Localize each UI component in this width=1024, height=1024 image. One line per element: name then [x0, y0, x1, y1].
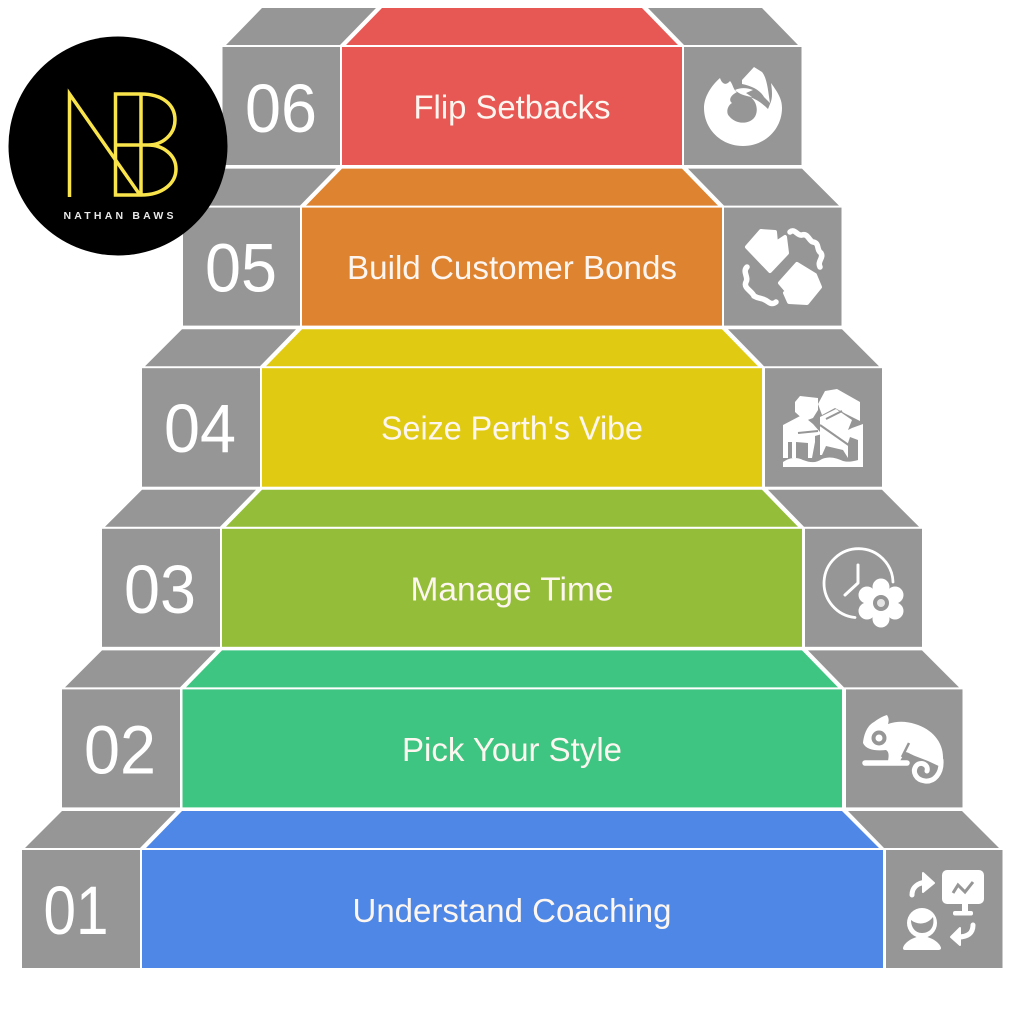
number 02: 02	[84, 712, 156, 788]
step 04: Seize Perth's Vibe	[142, 329, 882, 487]
icon: clock and gear	[824, 549, 904, 628]
label: Understand Coaching: Understand Coaching	[352, 892, 672, 929]
step 01: Understand Coaching	[22, 811, 1002, 968]
icon: city buildings	[783, 389, 863, 467]
label: Flip Setbacks: Flip Setbacks	[414, 88, 610, 126]
icon: handshake	[745, 231, 822, 304]
label: Pick Your Style: Pick Your Style	[402, 731, 622, 768]
number 01: 01	[44, 872, 108, 949]
number 05: 05	[205, 230, 277, 306]
logo monogram NB	[70, 94, 176, 197]
step 02: Pick Your Style	[62, 650, 962, 807]
icon: flame fox	[704, 67, 782, 146]
number 06: 06	[245, 70, 317, 147]
logo: Nathan Baws badge	[8, 36, 228, 256]
step 03: Manage Time	[102, 490, 922, 647]
icon: chameleon	[863, 715, 943, 781]
icon: coaching presentation	[903, 870, 984, 950]
number 04: 04	[164, 390, 236, 467]
label: Build Customer Bonds: Build Customer Bonds	[347, 249, 677, 286]
label: Seize Perth's Vibe: Seize Perth's Vibe	[381, 410, 643, 446]
step 06: Flip Setbacks	[222, 8, 802, 165]
logo wordmark: NATHAN BAWS	[64, 210, 174, 222]
number 03: 03	[124, 551, 196, 628]
step 05: Build Customer Bonds	[183, 169, 842, 326]
label: Manage Time: Manage Time	[410, 570, 614, 608]
